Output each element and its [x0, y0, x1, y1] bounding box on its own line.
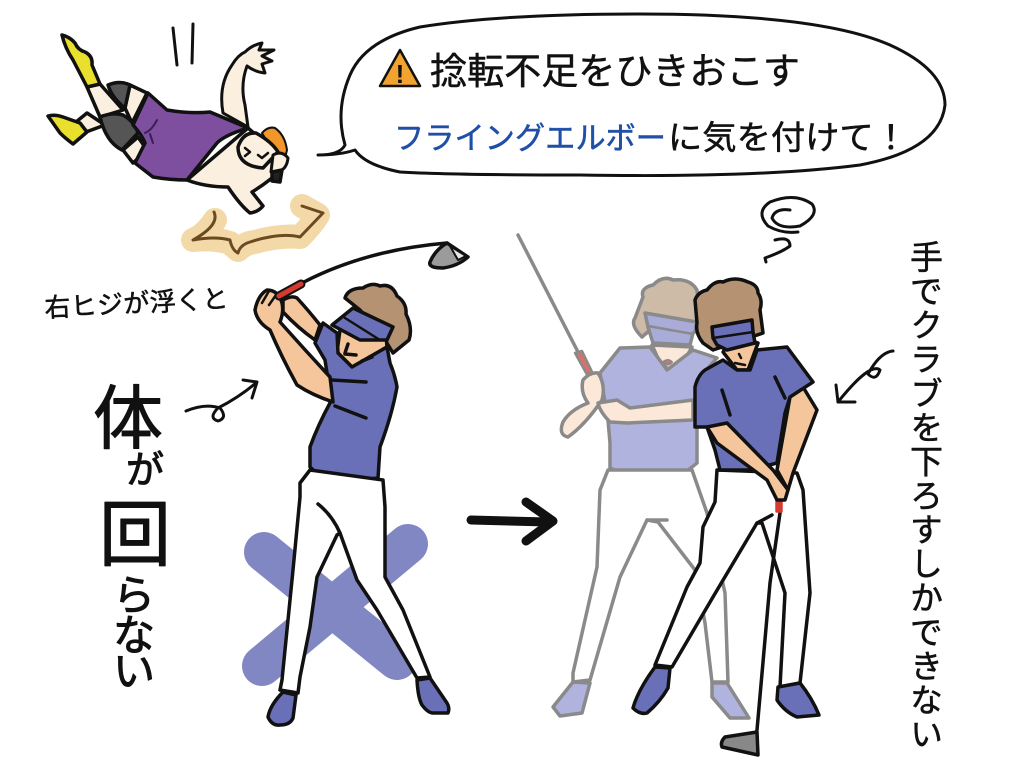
label: body does not rotate: 回: [99, 496, 171, 576]
hair: [634, 278, 700, 337]
purple singlet: [133, 93, 248, 180]
speech bubble: [318, 14, 945, 176]
label: right elbow lifts: 右ヒジが浮くと: [44, 283, 229, 323]
grip: [279, 284, 301, 296]
cross mark: [262, 544, 408, 666]
face: [652, 345, 692, 370]
front arm: [255, 290, 333, 402]
icon: warning triangle: [380, 50, 420, 89]
shirt folds: [332, 380, 366, 418]
chest: [187, 128, 285, 213]
visor: [332, 308, 393, 340]
club: [302, 243, 468, 283]
heading line 1: 捻転不足をひきおこす: [430, 51, 800, 92]
head: [238, 133, 278, 168]
visor: [712, 320, 755, 350]
hair: [262, 128, 287, 158]
label: body does not rotate: な: [113, 612, 155, 659]
face: [337, 330, 387, 367]
label: body does not rotate: が: [126, 450, 164, 492]
illustration: front golfer downswing: [633, 279, 819, 755]
far arm: [283, 297, 320, 340]
icon: warning triangle: !: [396, 59, 404, 89]
shirt: [600, 347, 717, 480]
face: [245, 148, 268, 158]
singlet seam: [145, 120, 157, 143]
impact marks: [173, 24, 193, 65]
pants: [280, 470, 430, 693]
face: [723, 335, 758, 370]
club: [518, 235, 620, 427]
arms and hands: [561, 373, 603, 437]
wristband: [272, 170, 282, 182]
label: can only bring the club down with hands: 手でクラブを下ろすしかできない: [906, 240, 942, 750]
front arm: [707, 423, 788, 500]
fist: [271, 153, 288, 172]
visor: [645, 313, 697, 345]
dust cloud: [193, 206, 323, 253]
label: body does not rotate: [93, 380, 171, 695]
label: body does not rotate: い: [113, 648, 155, 695]
illustration: falling wrestler: [48, 24, 323, 253]
heading line 2: blue part: フライングエルボー: [394, 121, 666, 156]
label: body does not rotate: ら: [113, 572, 155, 619]
heading line 2: black part: に気を付けて！: [668, 119, 908, 156]
shoes: [553, 682, 590, 716]
club: [721, 498, 781, 755]
shirt folds: [722, 377, 785, 415]
raised arm and hand: [222, 43, 274, 127]
illustration: faded golfer: [518, 235, 749, 718]
shirt: [310, 323, 397, 482]
hair: [345, 284, 410, 353]
fingers: [262, 291, 276, 305]
shirt: [695, 347, 813, 470]
pants: [655, 470, 810, 687]
arrow: curl toward golfer: [186, 380, 257, 421]
hair: [695, 279, 763, 350]
right shoe: [777, 683, 819, 717]
left shoe: [633, 667, 670, 713]
pants: [573, 470, 728, 682]
illustration: golfer at top of backswing: [255, 243, 468, 725]
label: body does not rotate: 体: [93, 380, 163, 458]
arrow: curl toward front golfer: [836, 351, 893, 402]
arrow: transition: [471, 502, 553, 541]
far arm: [777, 387, 817, 490]
shoes: [268, 692, 296, 725]
icon: confusion scribble: [762, 197, 814, 262]
legs and socks: [48, 35, 147, 163]
